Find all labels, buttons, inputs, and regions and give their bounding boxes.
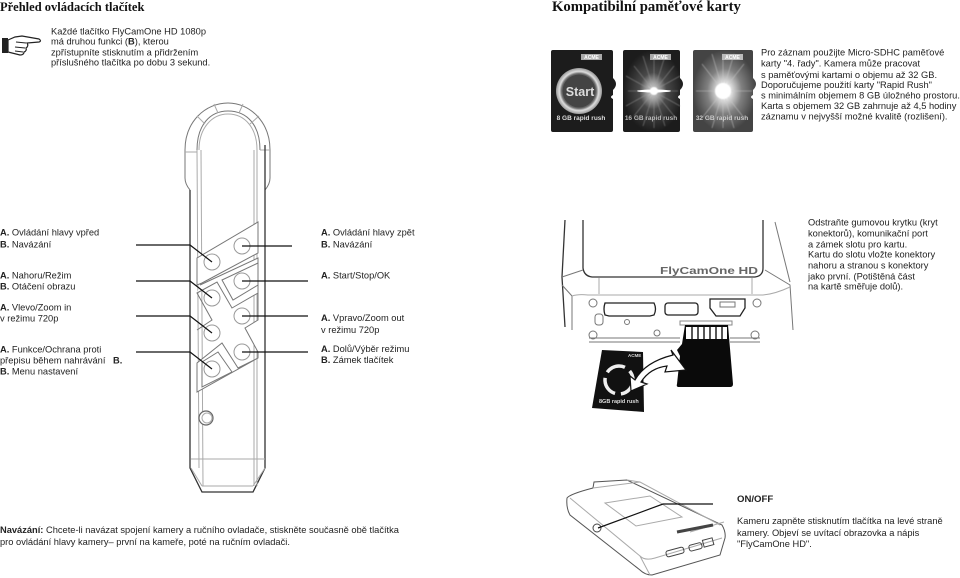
text block: button functions note: Každé tlačítko FlyCamOne HD 1080p xyxy=(51,26,206,36)
text block: on/off description: "FlyCamOne HD". xyxy=(737,539,812,549)
on/off button xyxy=(593,524,601,532)
ports xyxy=(666,538,714,557)
text block: memory card advice: Doporučujeme použití karty "Rapid Rush" xyxy=(761,80,932,90)
card: 32 GB xyxy=(693,50,756,132)
text block: button functions note: má druhou funkci (B), kterou xyxy=(51,36,169,46)
left labels: B. Otáčení obrazu xyxy=(0,282,75,292)
left labels: A. Funkce/Ochrana proti xyxy=(0,344,101,354)
text block: memory card advice: s minimálním objemem 8 GB úložného prostoru. xyxy=(761,90,960,100)
text block: memory card advice: karty "4. řady". Kamera může pracovat xyxy=(761,58,920,68)
memory cards xyxy=(551,50,756,132)
card: 8 GB: Start xyxy=(566,85,595,99)
text block: memory card advice xyxy=(761,48,960,122)
left labels: B. xyxy=(113,356,122,366)
icon: pointing hand xyxy=(2,36,40,55)
left labels: A. Vlevo/Zoom in xyxy=(0,302,71,312)
text block: pairing xyxy=(0,525,400,547)
left labels xyxy=(0,228,122,376)
text block: button functions note: příslušného tlačítka po dobu 3 sekund. xyxy=(51,58,210,68)
text block: pairing: Navázání: Chcete-li navázat spojení kamery a ručního ovladače, stiskněte současně obě tlačítka xyxy=(0,525,400,535)
large card: ACME xyxy=(628,353,641,358)
card: 32 GB: 32 GB rapid rush xyxy=(696,115,748,122)
text block: card insertion instructions: nahoru a stranou s konektory xyxy=(808,260,929,270)
card: 8 GB: ACME xyxy=(584,55,600,61)
button panels xyxy=(197,222,258,392)
micro SD card xyxy=(677,325,733,387)
ports xyxy=(589,299,761,339)
left labels: B. Menu nastavení xyxy=(0,366,78,376)
card: 8 GB: 8 GB rapid rush xyxy=(557,115,605,122)
leader lines xyxy=(136,245,308,369)
camera body xyxy=(562,220,793,342)
text block: memory card advice: Karta s objemem 32 GB zahrnuje až 4,5 hodiny xyxy=(761,101,957,111)
left labels: přepisu během nahrávání xyxy=(0,356,106,366)
text block: memory card advice: s paměťovými kartami o objemu až 32 GB. xyxy=(761,70,937,80)
right labels: A. Start/Stop/OK xyxy=(321,270,391,280)
text block: card insertion instructions: a zámek slotu pro kartu. xyxy=(808,240,907,250)
text block: card insertion instructions: na kartě směřuje dolů). xyxy=(808,282,903,292)
text block: card insertion instructions: konektorů), komunikační port xyxy=(808,228,928,238)
text block: on/off description: Kameru zapněte stisknutím tlačítka na levé straně xyxy=(737,516,943,526)
controller illustration xyxy=(136,103,308,492)
text block: card insertion instructions: Odstraňte gumovou krytku (kryt xyxy=(808,218,938,228)
card: 32 GB: ACME xyxy=(725,55,741,61)
card: 16 GB xyxy=(623,50,683,132)
right labels xyxy=(321,228,415,365)
right labels: A. Ovládání hlavy zpět xyxy=(321,228,415,238)
round port xyxy=(199,411,213,425)
camera brand label: FlyCamOne HD xyxy=(660,266,758,277)
right labels: A. Dolů/Výběr režimu xyxy=(321,344,409,354)
handle loop xyxy=(185,103,270,190)
device brand xyxy=(677,525,713,532)
card: 16 GB: 16 GB rapid rush xyxy=(625,115,677,122)
text block: button functions note: zpřístupníte stisknutím a přidržením xyxy=(51,48,199,58)
large card: 8GB rapid rush xyxy=(599,399,639,405)
right labels: A. Vpravo/Zoom out xyxy=(321,313,405,323)
buttons xyxy=(204,238,250,377)
camera top illustration xyxy=(567,480,725,575)
text block: card insertion instructions: jako první. (Potištěná část xyxy=(807,272,915,282)
left labels: A. Nahoru/Režim xyxy=(0,270,72,280)
large card xyxy=(592,350,644,412)
text block: on/off description: kamery. Objeví se uvítací obrazovka a nápis xyxy=(737,528,920,538)
leader line xyxy=(598,504,713,528)
heading: button overview: Přehled ovládacích tlačítek xyxy=(0,0,144,14)
card: 16 GB: ACME xyxy=(653,55,669,61)
text block: on/off description xyxy=(737,516,943,549)
right labels: v režimu 720p xyxy=(321,325,379,335)
right labels: B. Navázání xyxy=(321,240,373,250)
camera details xyxy=(570,480,724,575)
left labels: B. Navázání xyxy=(0,240,52,250)
card slot xyxy=(680,321,732,325)
camera outline xyxy=(567,480,725,575)
text block: pairing: pro ovládání hlavy kamery– první na kameře, poté na ručním ovladači. xyxy=(0,537,290,547)
text block: card insertion instructions xyxy=(807,218,938,292)
text block: card insertion instructions: Kartu do slotu vložte konektory xyxy=(808,250,935,260)
left labels: A. Ovládání hlavy vpřed xyxy=(0,228,99,238)
card: 8 GB xyxy=(551,50,616,132)
right labels: B. Zámek tlačítek xyxy=(321,355,394,365)
arrow: insert card xyxy=(630,350,686,391)
body outline xyxy=(190,145,265,492)
text block: memory card advice: záznamu v nejvyšší možné kvalitě (rozlišení). xyxy=(761,112,948,122)
left labels: v režimu 720p xyxy=(0,314,58,324)
text block: button functions note xyxy=(51,26,210,68)
heading: on/off: ON/OFF xyxy=(737,494,773,505)
camera rear illustration with card slot xyxy=(562,220,793,412)
text block: memory card advice: Pro záznam použijte Micro-SDHC paměťové xyxy=(761,48,944,58)
